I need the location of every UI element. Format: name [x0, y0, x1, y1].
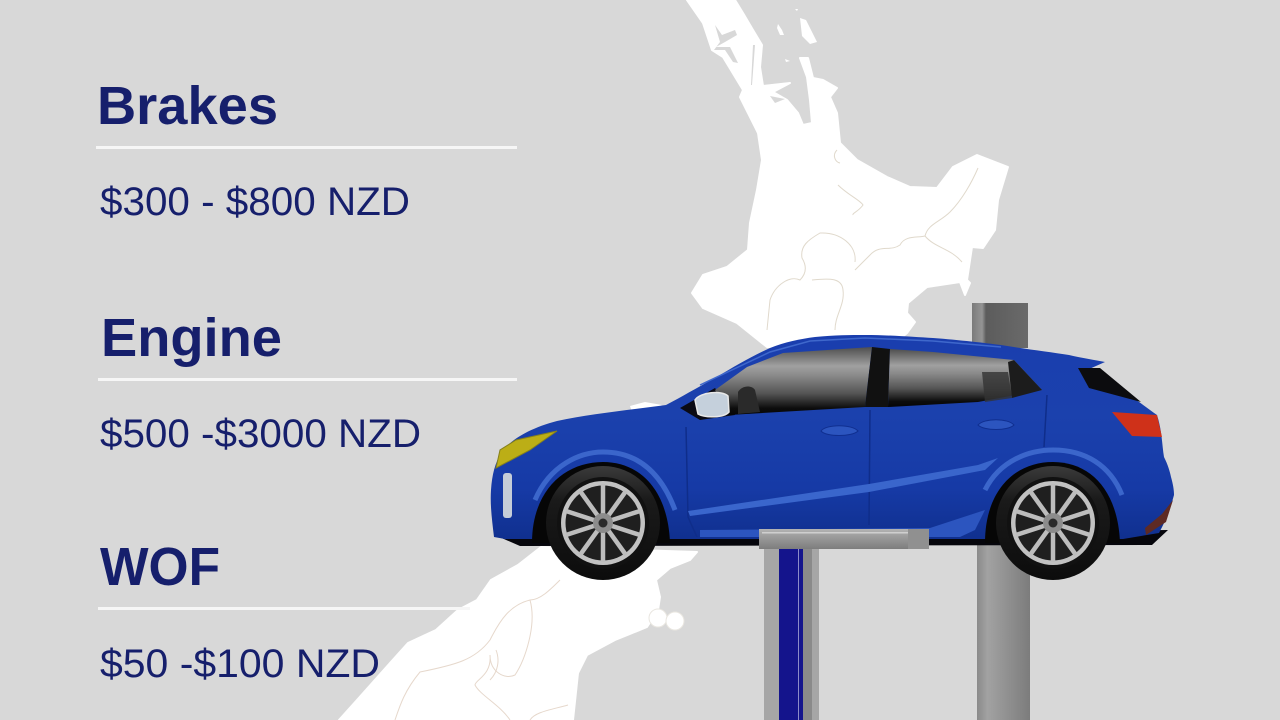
lift: left post [764, 545, 819, 720]
lift: platform [759, 529, 929, 549]
wheel arch: front [532, 462, 670, 543]
wheel arch: rear [985, 462, 1120, 543]
price: Engine: $500 -$3000 NZD [100, 412, 421, 456]
pillar [865, 347, 890, 407]
tail light [1112, 412, 1162, 437]
section: Brakes [96, 76, 517, 224]
rear seat shape [982, 372, 1012, 402]
map: North Island regional boundaries [767, 150, 978, 330]
lift: right post top [972, 303, 1028, 348]
window dark reflection [1008, 360, 1042, 398]
roof highlight [700, 338, 1001, 385]
character line [688, 458, 998, 516]
heading: Brakes: Brakes [97, 76, 278, 136]
car body [491, 335, 1174, 539]
headlight [496, 431, 557, 468]
mirror [695, 393, 729, 417]
map: bit of land behind car [630, 402, 662, 412]
lower sill highlight [700, 510, 985, 537]
door handle: rear [978, 420, 1014, 430]
map: South Island regional boundaries [395, 580, 568, 720]
mirror shadow [680, 388, 735, 420]
heading: Engine: Engine [101, 308, 282, 368]
front window [715, 347, 872, 415]
back side window [888, 349, 1042, 407]
divider: Brakes [96, 146, 517, 149]
map: New Zealand [339, 0, 1008, 720]
car lift [764, 303, 1030, 720]
car underbody shadow [497, 530, 1168, 546]
map: harbours [714, 25, 785, 103]
map: South Island [339, 547, 697, 720]
map: northern islands [777, 9, 817, 62]
section: WOF [98, 537, 470, 686]
front light strip [503, 473, 512, 518]
divider: WOF [98, 607, 470, 610]
price: Brakes: $300 - $800 NZD [100, 180, 410, 224]
section: Engine [98, 308, 517, 456]
heading: WOF: WOF [100, 537, 220, 597]
map: North Island [687, 0, 1008, 347]
price: WOF: $50 -$100 NZD [100, 642, 380, 686]
car [491, 335, 1174, 580]
divider: Engine [98, 378, 517, 381]
door handle: front [821, 426, 858, 436]
lift: right post lower [977, 535, 1030, 720]
rear reflector [1145, 500, 1173, 535]
front wheel [546, 466, 660, 580]
door lines [686, 395, 1047, 537]
front seat headrest [738, 386, 760, 414]
rear wheel [996, 466, 1110, 580]
rear window [1078, 368, 1141, 402]
map: eastern islands [649, 609, 684, 630]
wheel arch highlight: front [535, 452, 675, 510]
wheel arch highlight: rear [985, 450, 1122, 495]
